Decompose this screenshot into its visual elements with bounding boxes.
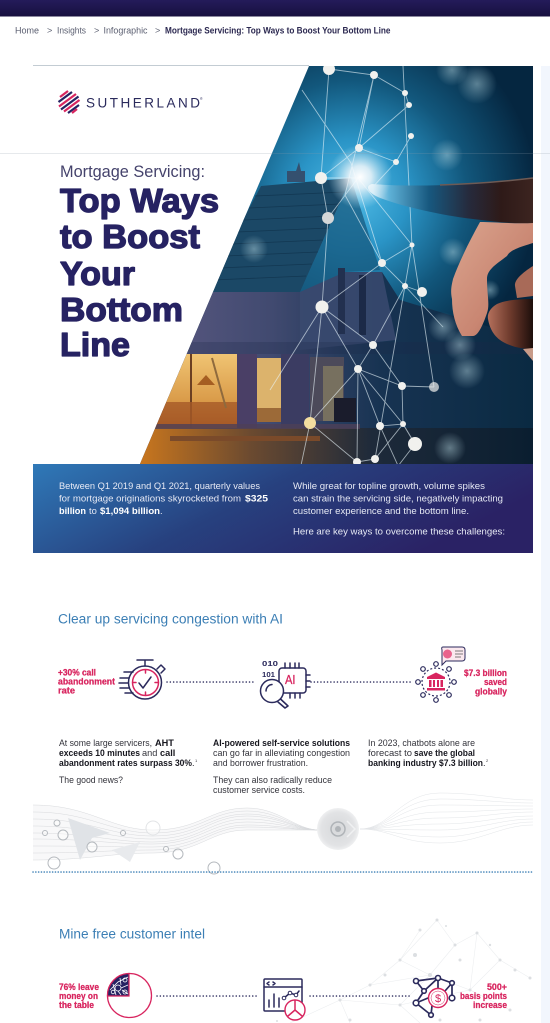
breadcrumb: > (94, 26, 99, 36)
text column 1: exceeds 10 minutes (59, 748, 140, 758)
intro text right (293, 480, 505, 536)
breadcrumb: Infographic (104, 26, 148, 36)
lens circle (317, 808, 359, 850)
top navigation bar (0, 0, 550, 16)
intro text left: for mortgage originations skyrocketed from (59, 492, 241, 504)
stat: basis points: increase (473, 1000, 507, 1010)
mesh background (276, 918, 532, 1023)
hero divider line (0, 153, 550, 154)
stat: basis points: 500+ (487, 982, 507, 992)
text column 1: 1 (195, 758, 198, 763)
stat: basis points (460, 982, 507, 1010)
stat: call abandonment: +30% call (58, 668, 96, 678)
hand pointing (368, 178, 533, 361)
text column 2: AI-powered self-service solutions (213, 738, 350, 748)
intro text left: . (160, 505, 163, 516)
text column 3 (368, 738, 489, 768)
icon: network with dollar: $ (435, 993, 441, 1005)
intro text left: billion (59, 505, 86, 516)
breadcrumb: Mortgage Servicing: Top Ways to Boost Your Bottom Line (165, 26, 390, 36)
title (60, 163, 219, 364)
text column 1: abandonment rates surpass 30% (59, 758, 192, 768)
stat: money left on the table (59, 982, 99, 1010)
icon: AI chip with magnifier: 010 (262, 659, 278, 668)
intro text right: customer experience and the bottom line. (293, 505, 469, 516)
icon: bank network with chat bubble (416, 647, 465, 702)
network lines (270, 66, 443, 470)
hero header rule (33, 65, 309, 66)
logo: Sutherland: ® (200, 97, 203, 101)
title: to Boost (60, 219, 200, 256)
title: Bottom (60, 292, 183, 329)
intro text right: can strain the servicing side, negatively impacting (293, 492, 503, 504)
icon: AI chip with magnifier: 101 (262, 670, 275, 679)
stat: savings: saved (484, 677, 507, 687)
text column 1: call (160, 748, 175, 758)
network nodes (304, 63, 439, 466)
intro text right: Here are key ways to overcome these challenges: (293, 526, 505, 536)
stat: call abandonment: abandonment (58, 676, 115, 686)
hero image: smart home and network (130, 54, 533, 470)
connector dots (157, 995, 258, 997)
text column 3: banking industry $7.3 billion (368, 758, 483, 768)
text column 1: . (192, 758, 195, 768)
text column 1 (59, 738, 198, 785)
roof and house (130, 162, 533, 464)
wave illustration (33, 793, 533, 874)
intro text left: $325 (245, 492, 268, 504)
text column 3: 2 (486, 758, 489, 763)
title: Your (60, 256, 135, 293)
text column 2: customer service costs. (213, 785, 305, 795)
intro text left: Between Q1 2019 and Q1 2021, quarterly values (59, 480, 260, 491)
intro text left: to (89, 505, 97, 516)
logo: Sutherland: SUTHERLAND (86, 96, 200, 110)
connector dots (310, 995, 412, 997)
text column 1: At some large servicers, (59, 738, 152, 748)
intro text left: $1,094 billion (100, 505, 160, 516)
icon: pie chart (107, 974, 152, 1018)
text column 3: forecast to (368, 748, 412, 758)
breadcrumb (15, 26, 390, 36)
heading: section 2: Mine free customer intel (59, 926, 205, 942)
connector dots (167, 681, 254, 683)
stat: basis points: basis points (460, 991, 507, 1001)
text column 3: In 2023, chatbots alone are (368, 738, 475, 748)
text column 2: can go far in alleviating congestion (213, 748, 350, 758)
fingertip glow (328, 145, 392, 209)
icon: stopwatch (119, 660, 165, 699)
intro band (33, 464, 533, 553)
title: Top Ways (60, 183, 219, 220)
soft bokeh lights (240, 54, 500, 464)
stat: savings (464, 668, 507, 696)
text column 1: and (142, 748, 157, 758)
title: Line (60, 327, 130, 364)
icon: AI chip with magnifier (260, 659, 310, 708)
text column 1: AHT (155, 738, 174, 748)
icon: analytics dashboard (264, 979, 305, 1020)
text column 3: save the global (414, 748, 475, 758)
text column 1: The good news? (59, 775, 123, 785)
text column 3: . (483, 758, 486, 768)
title: Mortgage Servicing: (60, 163, 205, 181)
breadcrumb: Home (15, 26, 39, 36)
stat: money left on the table: 76% leave (59, 982, 99, 992)
breadcrumb: > (47, 26, 52, 36)
text column 2 (213, 738, 350, 795)
icon: network with dollar (413, 976, 455, 1017)
logo: Sutherland (58, 91, 203, 113)
stat: savings: $7.3 billion (464, 668, 507, 678)
right sidebar strip (541, 66, 550, 1023)
text column 2: and borrower frustration. (213, 758, 308, 768)
connector dots (311, 681, 412, 683)
section divider dots (33, 871, 533, 873)
heading: section 1: Clear up servicing congestion with AI (58, 612, 283, 626)
breadcrumb: Insights (57, 26, 86, 36)
stat: call abandonment (58, 668, 115, 696)
stat: savings: globally (475, 686, 507, 696)
text column 2: They can also radically reduce (213, 775, 332, 785)
intro text left (59, 480, 268, 516)
stat: money left on the table: the table (59, 1000, 94, 1010)
intro text right: While great for topline growth, volume spikes (293, 480, 485, 491)
stat: money left on the table: money on (59, 991, 98, 1001)
breadcrumb: > (155, 26, 160, 36)
stat: call abandonment: rate (58, 686, 75, 696)
icon: AI chip with magnifier: AI (285, 673, 296, 687)
